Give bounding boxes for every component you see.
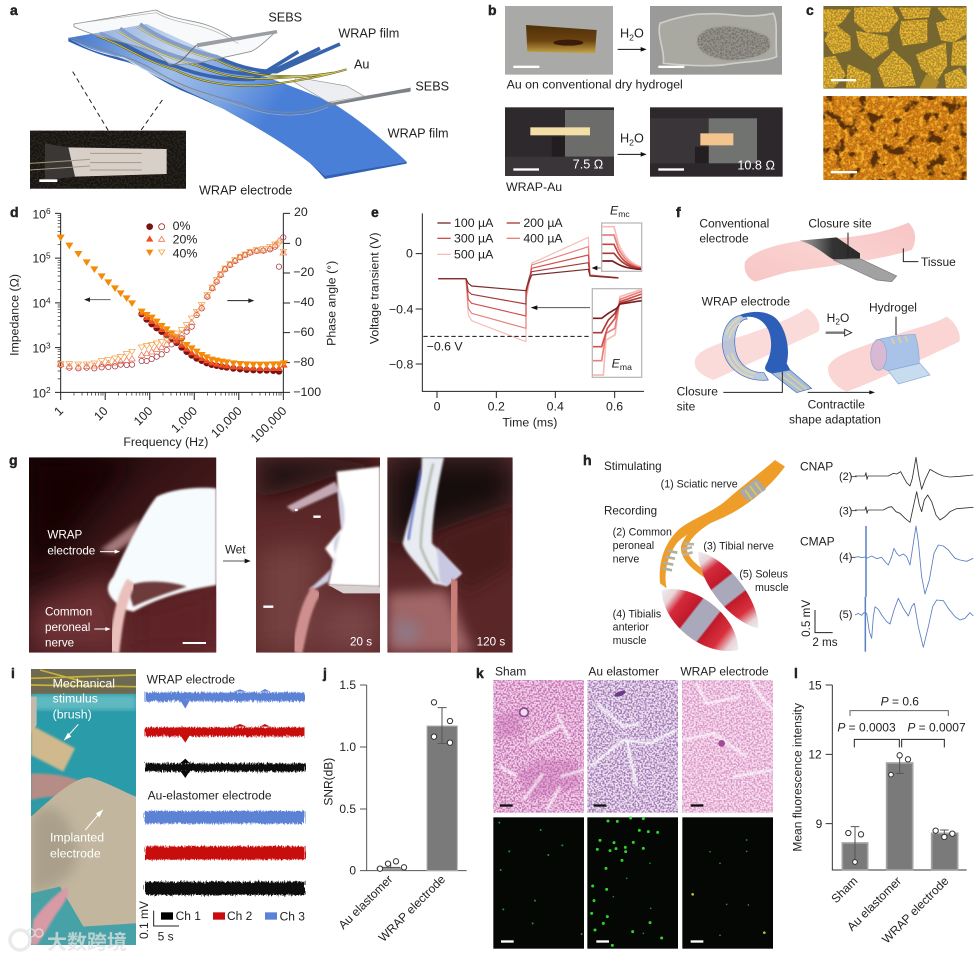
zoom guide lines bbox=[73, 72, 162, 132]
axis labels bbox=[367, 232, 623, 430]
panel letters: b bbox=[488, 2, 497, 18]
arrow: wet: Wet bbox=[225, 544, 246, 557]
axis labels: Au elastomer bbox=[336, 872, 395, 932]
axis labels: 0.5 bbox=[339, 802, 356, 816]
column titles bbox=[495, 665, 769, 679]
arrow: H2O in water: H bbox=[620, 132, 629, 146]
layer labels: WRAP film bbox=[388, 126, 449, 140]
right axis labels: Phase angle (°) bbox=[325, 261, 339, 346]
right axis labels: −100 bbox=[293, 385, 321, 399]
left axis labels: 2 bbox=[46, 385, 51, 395]
photo inset: WRAP electrode bbox=[30, 131, 186, 189]
photo annotations: Mechanical bbox=[53, 677, 115, 691]
conventional labels: Conventional bbox=[699, 217, 769, 231]
photo: after 120 s: 120 s bbox=[477, 636, 505, 649]
right axis labels: 20 bbox=[294, 205, 308, 219]
legend: 500 µA bbox=[454, 248, 494, 262]
labels on dry electrode photo bbox=[45, 529, 120, 649]
photo: after 20 s bbox=[256, 457, 380, 653]
nerve labels: Recording bbox=[604, 504, 657, 517]
axis labels: 0 bbox=[349, 864, 356, 878]
hydrogel label: Hydrogel bbox=[869, 301, 917, 315]
panel f: electrode wrapping schematic bbox=[677, 217, 960, 427]
WRAP electrode labels: WRAP electrode bbox=[702, 294, 790, 308]
scale bar: 0.1 mV bbox=[137, 901, 151, 939]
legend: 200 µA bbox=[523, 216, 563, 230]
recording heading: WRAP: WRAP electrode bbox=[147, 673, 235, 687]
trace labels bbox=[800, 460, 857, 621]
Au-elastomer recordings bbox=[145, 811, 305, 895]
photo annotations: electrode bbox=[50, 847, 101, 861]
left axis labels: 10 bbox=[32, 342, 46, 356]
photo: rat with brush stimulus bbox=[31, 669, 136, 945]
arrow: impedance axis bbox=[84, 297, 111, 302]
adapted WRAP electrode bbox=[828, 317, 960, 392]
arrow: H2O in water: O bbox=[634, 132, 644, 146]
axis labels: 0.2 bbox=[488, 400, 505, 414]
conventional labels: Tissue bbox=[921, 255, 956, 269]
inset: anodic potential bbox=[592, 289, 642, 377]
left axis labels: 5 bbox=[46, 250, 51, 260]
channel legend bbox=[161, 909, 305, 924]
arrow: H2O: H bbox=[827, 311, 835, 325]
photo: dry electrode on nerve bbox=[29, 457, 216, 653]
axis labels: 12 bbox=[808, 748, 822, 762]
WRAP electrode labels: Closure bbox=[677, 385, 718, 399]
nerve labels: peroneal bbox=[613, 540, 654, 552]
series: phase angle bbox=[61, 237, 283, 368]
panel letters: f bbox=[676, 204, 681, 220]
arrow: contractile adaptation: Contractile bbox=[808, 398, 865, 412]
arrow: to anodic inset bbox=[531, 305, 590, 310]
frequency axis labels: 100 bbox=[131, 404, 156, 428]
photo annotations: (brush) bbox=[53, 707, 92, 721]
legend bbox=[146, 219, 197, 260]
trace labels: CMAP bbox=[800, 534, 835, 548]
channel legend: Ch 1 bbox=[176, 909, 201, 923]
top SEBS layer bbox=[74, 10, 277, 65]
trace labels: (2) bbox=[839, 471, 852, 483]
electrode traces bbox=[97, 24, 347, 86]
axis labels: Mean fluorescence intensity bbox=[791, 703, 805, 852]
frequency axis labels: 100,000 bbox=[248, 404, 290, 445]
panel c: micrographs bbox=[823, 6, 967, 180]
recording traces bbox=[855, 457, 973, 652]
middle SEBS layer bbox=[72, 37, 411, 115]
trace labels: (4) bbox=[839, 552, 852, 564]
frequency axis labels: 1 bbox=[51, 404, 66, 419]
panel letters: d bbox=[10, 204, 19, 220]
scale bar: 0.5 mV bbox=[800, 600, 813, 637]
column titles: WRAP electrode bbox=[680, 665, 769, 679]
H&E: WRAP electrode bbox=[682, 680, 773, 813]
photo annotations bbox=[50, 677, 115, 861]
left axis labels: 10 bbox=[32, 252, 46, 266]
panel a: exploded layers of the WRAP electrode bbox=[30, 10, 449, 198]
legend bbox=[437, 216, 563, 262]
axis labels: 9 bbox=[816, 817, 823, 831]
left axis labels: 10 bbox=[32, 207, 46, 221]
axis labels: Sham bbox=[828, 874, 860, 906]
arrow: H2O swelling: 2 bbox=[629, 32, 634, 42]
arrow: H2O in water: 2 bbox=[629, 137, 634, 147]
panel letters: i bbox=[11, 665, 15, 681]
right axis labels bbox=[293, 205, 339, 399]
nerve labels: nerve bbox=[613, 553, 639, 565]
panel g: surgical photos bbox=[29, 457, 513, 653]
inset: cathodic potential: mc bbox=[618, 209, 630, 219]
nerve with electrodes bbox=[660, 460, 785, 588]
axis labels: Au elastomer bbox=[844, 874, 904, 934]
scale bar: 5 s bbox=[158, 930, 174, 944]
bottom WRAP film bbox=[68, 24, 407, 179]
photo: WRAP-Au after bbox=[650, 107, 783, 177]
caption: WRAP-Au bbox=[506, 180, 562, 194]
layer labels: Au bbox=[354, 58, 369, 72]
scale bar bbox=[800, 600, 838, 649]
nerve labels bbox=[604, 460, 789, 647]
panel letters: h bbox=[583, 452, 592, 468]
photo: swollen hydrogel bbox=[650, 6, 782, 75]
frequency axis labels: 10,000 bbox=[208, 404, 245, 440]
axis labels: WRAP electrode bbox=[879, 874, 952, 946]
labels on dry electrode photo: peroneal bbox=[45, 621, 90, 634]
series: impedance bbox=[61, 238, 284, 371]
watermark bbox=[10, 929, 127, 954]
panel l: fluorescence intensity bar chart bbox=[791, 678, 967, 946]
recording heading: Au-elastomer: Au-elastomer electrode bbox=[148, 789, 272, 803]
channel legend: Ch 2 bbox=[227, 909, 253, 923]
photo: after 20 s: 20 s bbox=[350, 636, 372, 649]
right axis labels: 0 bbox=[295, 235, 302, 249]
arrow: to cathodic inset bbox=[592, 266, 601, 270]
significance brackets: P = 0.6 bbox=[881, 695, 919, 709]
axis labels: −0.8 bbox=[389, 357, 413, 371]
left axis labels: Impedance (Ω) bbox=[7, 274, 21, 356]
arrow: contractile adaptation: shape adaptation bbox=[789, 413, 881, 427]
panel i: in vivo recording bbox=[31, 669, 305, 945]
arrow: wet bbox=[223, 544, 251, 563]
WRAP electrode labels: site bbox=[677, 400, 696, 414]
threshold line: −0.6 V bbox=[427, 340, 463, 354]
scale bar bbox=[137, 901, 179, 944]
inset: cathodic potential bbox=[602, 203, 642, 271]
axis labels: 0 bbox=[406, 247, 413, 261]
significance brackets bbox=[837, 695, 966, 747]
axis labels: Voltage transient (V) bbox=[367, 232, 381, 344]
fluorescence: sham bbox=[493, 817, 584, 949]
frequency axis labels bbox=[51, 404, 290, 449]
frequency axis labels: Frequency (Hz) bbox=[123, 435, 208, 449]
panel letters bbox=[9, 2, 814, 681]
panel letters: j bbox=[322, 665, 327, 681]
frequency axis labels: 10 bbox=[91, 404, 111, 423]
axis labels: 1.5 bbox=[339, 678, 356, 692]
significance brackets: P = 0.0003 bbox=[837, 721, 896, 735]
panel letters: e bbox=[371, 204, 379, 220]
arrow: H2O bbox=[826, 311, 852, 336]
axis labels: Time (ms) bbox=[502, 416, 557, 430]
layer labels: SEBS bbox=[268, 11, 302, 25]
micrograph: cracked gold film bbox=[823, 6, 967, 89]
fluorescence: Au elastomer bbox=[587, 817, 678, 949]
panel letters: a bbox=[10, 2, 18, 18]
axis labels: 15 bbox=[808, 678, 822, 692]
bars bbox=[842, 763, 958, 870]
right axis labels: −40 bbox=[293, 295, 314, 309]
panel k: histology bbox=[493, 665, 773, 949]
conventional labels bbox=[699, 217, 956, 269]
nerve labels: anterior bbox=[613, 622, 649, 634]
panel e: voltage transient bbox=[367, 203, 644, 430]
axes bbox=[826, 685, 967, 870]
legend: 20% bbox=[173, 233, 197, 247]
arrow: H2O: 2 bbox=[835, 317, 840, 327]
panel j: SNR bar chart bbox=[321, 678, 467, 945]
axes bbox=[360, 685, 467, 871]
axis labels: SNR(dB) bbox=[321, 758, 335, 806]
column titles: Sham bbox=[495, 665, 526, 679]
scale bar: 2 ms bbox=[812, 636, 838, 649]
axis labels: WRAP electrode bbox=[376, 872, 448, 945]
frequency axis labels: 1,000 bbox=[168, 404, 200, 436]
nerve labels: (3) Tibial nerve bbox=[703, 540, 774, 552]
soleus muscle bbox=[687, 543, 769, 637]
layer labels bbox=[199, 11, 449, 198]
inset: anodic potential: E bbox=[612, 356, 620, 370]
left axis labels: 10 bbox=[32, 386, 46, 400]
caption: Au on conventional dry hydrogel bbox=[507, 78, 683, 92]
nerve labels: (2) Common bbox=[613, 527, 672, 539]
left axis labels bbox=[7, 206, 51, 400]
labels on dry electrode photo: electrode bbox=[47, 544, 95, 557]
layer labels: WRAP electrode bbox=[199, 184, 292, 198]
traces bbox=[438, 237, 618, 342]
axes bbox=[416, 213, 644, 398]
legend: 40% bbox=[173, 246, 197, 260]
inset: anodic potential: ma bbox=[620, 362, 632, 372]
arrow: phase axis bbox=[227, 298, 254, 303]
H&E: sham bbox=[493, 680, 584, 813]
significance brackets: P = 0.0007 bbox=[907, 721, 966, 735]
trace labels: (3) bbox=[839, 506, 852, 518]
legend: 400 µA bbox=[523, 232, 563, 246]
panel letters: g bbox=[9, 452, 18, 468]
axis labels: 1.0 bbox=[339, 740, 356, 754]
panel h: nerve anatomy and recordings bbox=[604, 457, 973, 666]
nerve labels: Stimulating bbox=[604, 460, 662, 473]
trace labels: (5) bbox=[839, 609, 852, 621]
left axis labels: 4 bbox=[46, 295, 51, 305]
trace labels: CNAP bbox=[800, 460, 833, 474]
right axis labels: −80 bbox=[293, 355, 314, 369]
conventional electrode on tissue bbox=[745, 223, 918, 282]
labels on dry electrode photo: nerve bbox=[45, 636, 74, 649]
nerve labels: (4) Tibialis bbox=[613, 608, 661, 620]
WRAP recordings bbox=[145, 689, 305, 778]
inset: cathodic potential: E bbox=[610, 203, 618, 217]
axis labels: 0.4 bbox=[547, 400, 564, 414]
axes bbox=[55, 213, 290, 400]
left axis labels: 3 bbox=[46, 340, 51, 350]
axis labels: 0 bbox=[434, 400, 441, 414]
arrow: contractile adaptation bbox=[789, 390, 881, 427]
right axis labels: −60 bbox=[293, 325, 314, 339]
photo: WRAP-Au before: 7.5 Ω bbox=[573, 157, 603, 171]
panel letters: k bbox=[476, 665, 484, 681]
arrow: H2O: O bbox=[840, 311, 849, 325]
right axis labels: −20 bbox=[293, 265, 314, 279]
photo annotations: Implanted bbox=[50, 831, 104, 845]
panel d: impedance and phase angle bbox=[7, 205, 339, 449]
nerve labels: (1) Sciatic nerve bbox=[661, 479, 738, 491]
photo: dry hydrogel bbox=[505, 6, 613, 75]
fluorescence: WRAP electrode bbox=[682, 817, 773, 949]
arrow: H2O swelling: H bbox=[620, 27, 629, 41]
labels on dry electrode photo: Common bbox=[45, 606, 92, 619]
H&E: Au elastomer bbox=[587, 680, 678, 813]
photo: WRAP-Au after: 10.8 Ω bbox=[737, 158, 775, 172]
error bars and data points bbox=[846, 753, 955, 864]
left axis labels: 10 bbox=[32, 297, 46, 311]
column titles: Au elastomer bbox=[588, 665, 659, 679]
axis labels bbox=[791, 678, 952, 946]
left axis labels: 6 bbox=[46, 206, 51, 216]
micrograph: continuous gold on WRAP bbox=[823, 96, 967, 180]
axis labels: −0.4 bbox=[389, 302, 413, 316]
nerve labels: muscle bbox=[613, 635, 646, 647]
legend: 300 µA bbox=[454, 232, 494, 246]
layer labels: WRAP film bbox=[338, 27, 399, 41]
conventional labels: Closure site bbox=[808, 217, 872, 231]
legend: 100 µA bbox=[454, 216, 494, 230]
nerve labels: (5) Soleus bbox=[739, 569, 788, 581]
panel b: Au on hydrogel versus WRAP-Au bbox=[505, 6, 783, 194]
arrow: H2O in water bbox=[618, 132, 647, 157]
arrow: H2O swelling: O bbox=[634, 27, 644, 41]
conventional labels: electrode bbox=[699, 232, 749, 246]
tibialis anterior muscle bbox=[649, 574, 751, 666]
layer labels: SEBS bbox=[415, 80, 449, 94]
axis labels: 0.6 bbox=[606, 400, 623, 414]
WRAP electrode labels bbox=[677, 294, 790, 414]
channel legend: Ch 3 bbox=[280, 910, 305, 924]
nerve labels: muscle bbox=[755, 582, 789, 594]
watermark: 大数跨境 bbox=[47, 930, 127, 954]
photo: after 120 s bbox=[387, 457, 513, 653]
photo annotations: stimulus bbox=[53, 692, 98, 706]
panel letters: l bbox=[794, 665, 798, 681]
WRAP electrode on tissue bbox=[695, 308, 819, 393]
panel letters: c bbox=[806, 2, 814, 18]
bars and data points bbox=[377, 700, 457, 871]
photo: WRAP-Au before bbox=[505, 107, 614, 176]
axis labels bbox=[321, 678, 448, 945]
legend: 0% bbox=[173, 219, 191, 233]
labels on dry electrode photo: WRAP bbox=[47, 529, 83, 542]
arrow: H2O swelling bbox=[618, 27, 647, 52]
